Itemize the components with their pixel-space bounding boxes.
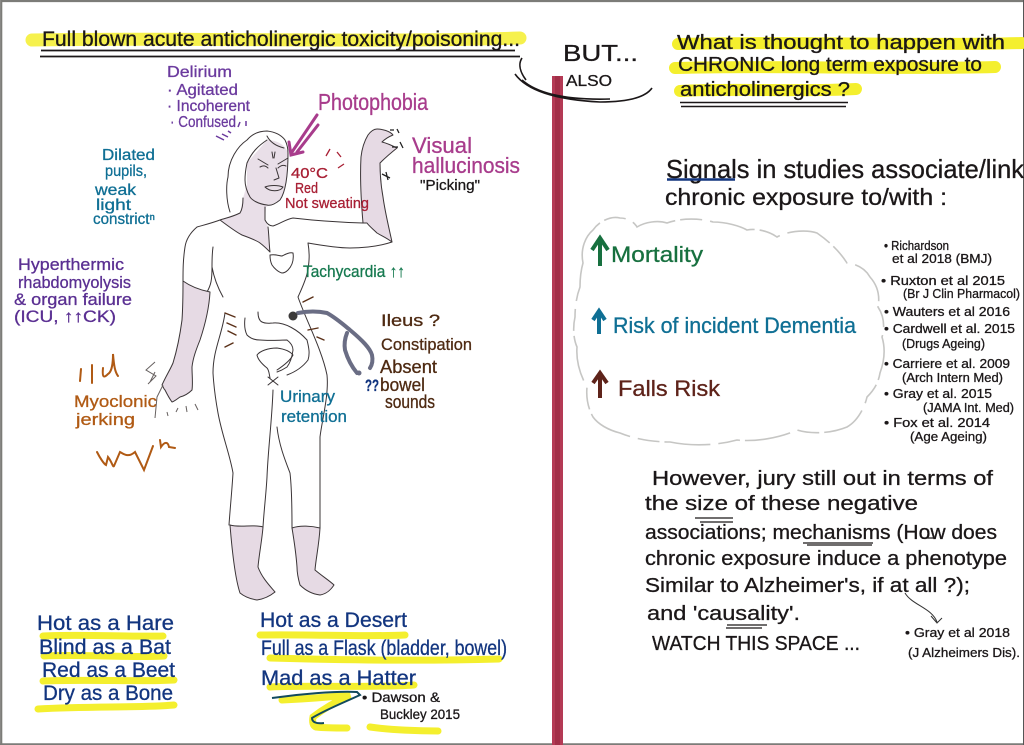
heading: chronic exposure question: CHRONIC long term exposure to xyxy=(678,54,982,76)
label: tachycardia: Tachycardia ↑↑ xyxy=(303,262,405,281)
heading: chronic exposure question: anticholinergics ? xyxy=(680,79,850,101)
heading: chronic exposure question xyxy=(675,32,1022,106)
heading: but also xyxy=(515,40,652,102)
risk: mortality xyxy=(592,238,703,267)
text block: jury still out: the size of these negative xyxy=(645,493,918,515)
label: urinary retention: Urinary xyxy=(280,387,335,406)
reference list: • Fox et al. 2014 xyxy=(884,415,990,430)
label: temperature xyxy=(285,149,369,212)
text block: jury still out: However, jury still out in terms of xyxy=(652,468,994,490)
label: ileus and bowel sounds: Constipation xyxy=(381,335,472,354)
label: delirium xyxy=(167,64,251,140)
label: dilated pupils: weak xyxy=(94,182,137,199)
reference list: (Drugs Ageing) xyxy=(902,336,985,351)
label: visual hallucinosis: Visual xyxy=(412,133,472,158)
reference list xyxy=(881,238,1020,444)
label: ileus and bowel sounds: sounds xyxy=(385,392,435,412)
figure: torso and limbs outline xyxy=(183,242,392,528)
risk: mortality: Mortality xyxy=(611,242,703,267)
label: hyperthermic rhabdomyolysis xyxy=(14,255,132,326)
text block: jury still out: chronic exposure induce a phenotype xyxy=(645,548,1007,570)
heading: chronic exposure question: What is thought to happen with xyxy=(677,32,1005,54)
reference list: • Cardwell et al. 2015 xyxy=(884,321,1015,336)
label: photophobia with arrow xyxy=(289,89,428,155)
label: temperature: Red xyxy=(295,180,318,197)
heading: but also: BUT... xyxy=(563,40,638,66)
text block: jury still out: Similar to Alzheimer's, if at all ?); xyxy=(645,575,970,597)
title: acute toxicity: Full blown acute anticholinergic toxicity/poisoning... xyxy=(42,28,520,51)
reference list: (JAMA Int. Med) xyxy=(923,400,1014,415)
label: dilated pupils: pupils, xyxy=(105,163,147,180)
label: ileus and bowel sounds: Absent xyxy=(380,357,437,377)
label: urinary retention: retention xyxy=(281,407,347,426)
reference list: (Age Ageing) xyxy=(910,429,987,444)
figure: face and neck skin xyxy=(220,140,288,252)
label: hyperthermic rhabdomyolysis: & organ failure xyxy=(14,290,132,309)
cloud panel: chronic risks xyxy=(574,218,884,445)
label: dilated pupils xyxy=(93,147,155,228)
label: ileus and bowel sounds: Ileus ? xyxy=(381,311,440,330)
figure: left lower leg xyxy=(230,525,275,600)
reference list: • Gray et al. 2015 xyxy=(884,386,992,401)
body figure xyxy=(162,129,397,600)
text block: jury still out: and 'causality'. xyxy=(647,603,800,625)
heat and abdominal strokes xyxy=(225,297,324,347)
label: hyperthermic rhabdomyolysis: Hyperthermic xyxy=(18,255,125,274)
figure: raised arm xyxy=(361,129,397,242)
heading: signals xyxy=(665,154,1024,210)
mnemonic list: left column: Blind as a Bat xyxy=(39,636,171,659)
label: delirium: · Agitated xyxy=(167,82,238,99)
text block: jury still out: WATCH THIS SPACE ... xyxy=(652,633,860,655)
label: visual hallucinosis: hallucinosis xyxy=(412,153,520,178)
risk: dementia: Risk of incident Dementia xyxy=(613,313,857,338)
central divider: red vertical bar xyxy=(552,76,563,745)
label: temperature: Not sweating xyxy=(285,195,369,212)
reference list: • Wauters et al 2016 xyxy=(884,304,1010,319)
mnemonic list: right column: Mad as a Hatter xyxy=(261,667,416,690)
icon: bowel and bladder xyxy=(245,312,309,385)
label: hyperthermic rhabdomyolysis: rhabdomyolysis xyxy=(18,273,131,292)
label: myoclonic jerking: Myoclonic xyxy=(74,392,158,411)
mnemonic list: right column: • Dawson & xyxy=(362,689,441,705)
risk: falls: Falls Risk xyxy=(618,376,721,401)
label: ileus and bowel sounds: bowel xyxy=(380,375,425,395)
label: myoclonic jerking xyxy=(74,354,198,470)
reference: gray 2018 with arrow: • Gray et al 2018 xyxy=(905,625,1010,640)
text block: jury still out xyxy=(645,468,1007,655)
label: visual hallucinosis xyxy=(382,129,520,194)
reference list: • Carriere et al. 2009 xyxy=(884,356,1010,371)
mnemonic list: left column: Dry as a Bone xyxy=(43,682,173,705)
label: delirium: · Incoherent xyxy=(167,98,251,115)
label: photophobia with arrow: Photophobia xyxy=(318,89,428,115)
cloud outline xyxy=(574,218,884,445)
label: visual hallucinosis: "Picking" xyxy=(420,177,480,194)
reference: gray 2018 with arrow: (J Alzheimers Dis). xyxy=(908,645,1020,660)
label: myoclonic jerking: jerking xyxy=(75,410,135,429)
figure: lower arm with hand xyxy=(162,281,210,402)
icon: stethoscope xyxy=(288,312,372,376)
label: dilated pupils: constrictⁿ xyxy=(93,211,155,228)
mnemonic list: right column xyxy=(260,609,507,731)
label: ileus and bowel sounds xyxy=(365,311,472,412)
mnemonic list: right column: Buckley 2015 xyxy=(380,706,460,722)
label: dilated pupils: light xyxy=(96,197,132,214)
heading: signals: chronic exposure to/with : xyxy=(665,184,947,210)
reference list: • Richardson xyxy=(884,238,949,253)
mnemonic list: left column: Hot as a Hare xyxy=(37,612,174,635)
mnemonic list: left column xyxy=(37,612,175,709)
text block: jury still out: associations; mechanisms (How does xyxy=(645,522,997,544)
risk: falls xyxy=(593,373,721,401)
reference list: et al 2018 (BMJ) xyxy=(892,251,992,266)
mnemonic list: right column: Hot as a Desert xyxy=(260,609,407,632)
label: hyperthermic rhabdomyolysis: (ICU, ↑↑CK) xyxy=(14,307,116,326)
icon: heart xyxy=(270,253,293,273)
label: urinary retention xyxy=(280,387,347,426)
label: temperature: 40°C xyxy=(291,165,328,182)
reference list: • Ruxton et al 2015 xyxy=(881,273,1005,288)
mnemonic list: right column: Full as a Flask (bladder, bowel) xyxy=(261,637,507,660)
figure: right lower leg xyxy=(292,526,334,595)
figure: hair and head lines xyxy=(183,131,363,282)
reference list: (Arch Intern Med) xyxy=(902,370,1003,385)
heading: but also: ALSO xyxy=(566,73,612,90)
label: dilated pupils: Dilated xyxy=(102,147,155,164)
reference list: (Br J Clin Pharmacol) xyxy=(903,286,1020,301)
label: ileus and bowel sounds: ?? xyxy=(365,376,379,395)
mnemonic list: left column: Red as a Beet xyxy=(42,659,175,682)
label: delirium: Delirium xyxy=(167,64,232,81)
heading: signals: Signals in studies associate/link xyxy=(666,154,1024,184)
reference: gray 2018 with arrow xyxy=(905,593,1020,660)
label: delirium: · Confused xyxy=(170,114,236,131)
